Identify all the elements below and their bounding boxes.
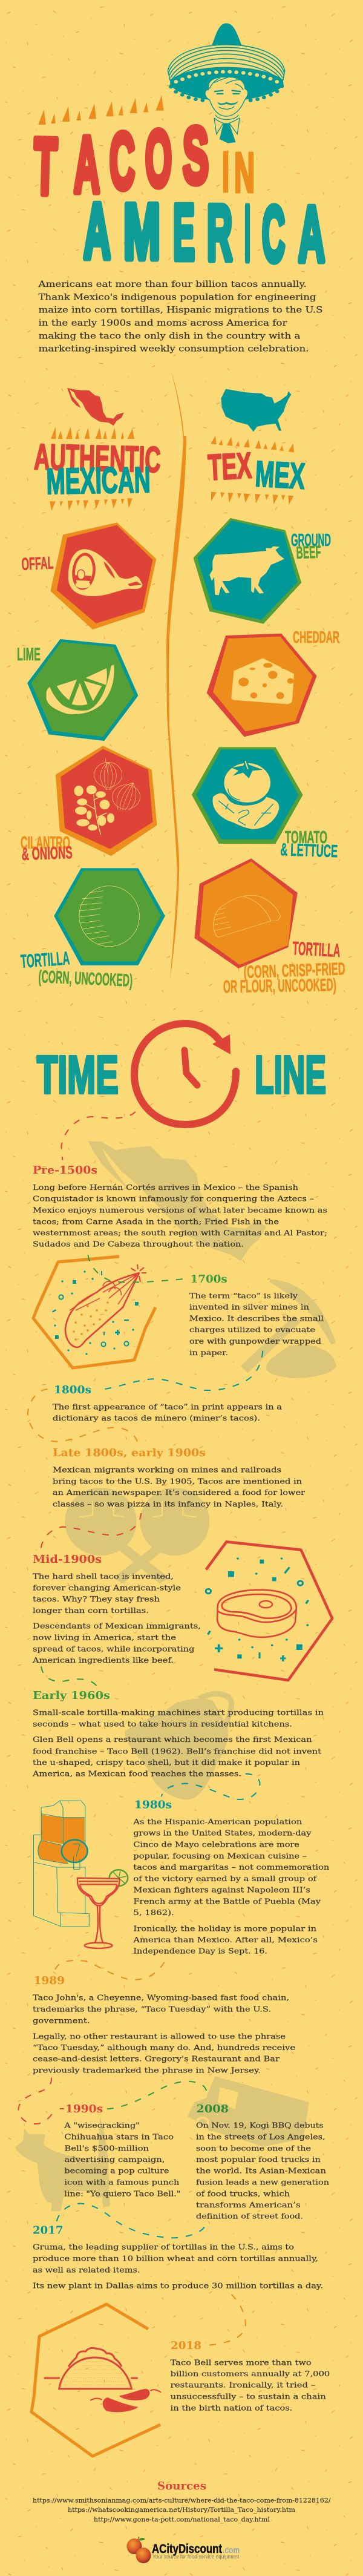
- connector: early 1960s to 1980s: [162, 1774, 260, 1799]
- title: Tacos: O: [145, 114, 172, 203]
- heading: Early 1960s: Early 1960s: [33, 1689, 110, 1702]
- watermark: pickaxe and rock: [241, 1279, 336, 1378]
- hexagon: ground beef: [194, 518, 301, 624]
- label: tomato and lettuce: TOMATO: [285, 828, 327, 847]
- text: 1989: “Taco Tuesday,” although many do. And, hundreds receive: [33, 2043, 295, 2052]
- heading: 1700s: 1700s: [191, 1273, 227, 1286]
- bunting: below Tex Mex: [211, 492, 293, 505]
- text: Early 1960s: [32, 1707, 324, 1778]
- connector: 1990s to 2008: [107, 2082, 208, 2109]
- label: cilantro and onions: & ONIONS: [21, 843, 73, 864]
- text: Mid-1900s: [32, 1571, 201, 1664]
- icon: onions and cilantro: [74, 758, 140, 834]
- text: 1989: previously trademarked the phrase in New Jersey.: [33, 2065, 261, 2074]
- intro text: [38, 280, 323, 354]
- heading: 1989: 1989: [34, 1974, 65, 1987]
- illustration: margarita machine and glass: [33, 1801, 128, 1948]
- title: Tacos: T: [33, 122, 58, 211]
- intro text: making the taco the only dish in the country with a: [39, 331, 300, 341]
- text: Pre-1500s: Mexico enjoys numerous versions of what later became known as: [33, 1205, 327, 1214]
- connector: mid-1900s to early 1960s: [41, 1666, 97, 1687]
- heading: Mexican: MEXICAN: [46, 459, 151, 502]
- text: 1989: Taco John's, a Cheyenne, Wyoming-based fast food chain,: [33, 1993, 289, 2002]
- text: 1980s: Cinco de Mayo celebrations are more: [133, 1840, 299, 1849]
- text: 1980s: tacos and margaritas – not commemoration: [133, 1862, 329, 1871]
- text: Early 1960s: the u-shaped, crispy taco shell, but it did make it popular in: [33, 1758, 300, 1767]
- title: America: R: [207, 189, 232, 277]
- text: A: [298, 191, 325, 278]
- text: 1990s: Bell's $500-million: [64, 2143, 149, 2152]
- title: In: N: [234, 141, 255, 204]
- text: 1990s: becoming a pop culture: [64, 2166, 169, 2175]
- logo: ACityDiscount: ACityDiscount: [152, 2542, 222, 2556]
- text: 2017: Gruma, the leading supplier of tortillas in the U.S., aims to: [33, 2242, 294, 2252]
- text: 1700s: in paper.: [189, 1348, 228, 1357]
- bunting: below Mexican: [50, 498, 132, 511]
- intro text: Americans eat more than four billion tacos annually.: [38, 280, 307, 289]
- watermark: crossed maracas: [65, 1488, 209, 1584]
- text: 1990s: advertising campaign,: [64, 2155, 165, 2164]
- text: 1700s: invented in silver mines in: [189, 1303, 309, 1312]
- hexagon: cilantro and onions: [56, 746, 157, 856]
- connector: 1700s to 1800s: [99, 1351, 263, 1390]
- text: 1990s: icon with a famous punch: [64, 2177, 179, 2186]
- label: offal: OFFAL: [21, 553, 54, 574]
- icon: lime wedge: [47, 665, 114, 714]
- text: 1989: Legally, no other restaurant is allowed to use the phrase: [33, 2031, 286, 2040]
- title: America: I: [244, 190, 250, 277]
- text: 2008: most popular food trucks in: [196, 2155, 321, 2164]
- connector: 2017 to 2018: [206, 2295, 246, 2345]
- text: 1980s: Ironically, the holiday is more popular in: [133, 1924, 316, 1933]
- intro text: marketing-inspired weekly consumption celebration.: [39, 344, 309, 354]
- intro text: maize into corn tortillas, Hispanic migrations to the U.S: [39, 306, 323, 315]
- text: 2008: transforms American’s: [196, 2200, 301, 2209]
- bunting: above Authentic: [51, 427, 134, 439]
- hexagon: tomato and lettuce: [192, 747, 303, 844]
- text: 1989: government.: [33, 2016, 90, 2025]
- hexagon: lime: [27, 639, 138, 741]
- text: Pre-1500s: Long before Hernán Cortés arrives in Mexico – the Spanish: [33, 1183, 298, 1192]
- text: 1980s: Independence Day is Sept. 16.: [133, 1947, 267, 1956]
- logo: ACityDiscount: Your source for food service equipment: [152, 2554, 239, 2560]
- text: 1990s: Chihuahua stars in Taco: [64, 2132, 174, 2141]
- icon: ham: [68, 549, 142, 596]
- label: cilantro and onions: [21, 833, 73, 864]
- text: Pre-1500s: Conquistador is known infamously for conquering the Aztecs –: [33, 1194, 314, 1203]
- hexagon: tex-mex tortilla: [194, 858, 298, 968]
- text: Pre-1500s: Sudados and De Cabeza throughout the nation.: [33, 1240, 244, 1249]
- intro text: Thank Mexico's indigenous population for engineering: [39, 292, 316, 302]
- icon: taco shell: [214, 895, 280, 937]
- text: late 1800s: [53, 1465, 305, 1508]
- text: 1800s: [53, 1402, 283, 1422]
- text: 2018: restaurants. Ironically, it tried –: [171, 2380, 315, 2390]
- text: Mid-1900s: now living in America, start the: [33, 1633, 176, 1642]
- text: 1700s: The term “taco” is likely: [189, 1291, 298, 1300]
- text: 1980s: French army at the Battle of Puebla (May: [133, 1896, 321, 1905]
- icon: tomato and lettuce: [212, 759, 279, 829]
- hexagon: cheddar: [207, 634, 317, 737]
- text: 2017: [33, 2242, 323, 2290]
- text: Mid-1900s: forever changing American-style: [33, 1583, 181, 1592]
- text: 2008: definition of street food.: [196, 2212, 303, 2221]
- connector: 1800s to late 1800s: [28, 1389, 139, 1445]
- icon: cheese: [231, 658, 294, 704]
- label: cilantro and onions: CILANTRO: [21, 833, 70, 853]
- icon: clock with arrow: [134, 1024, 236, 1125]
- text: 2018: unsuccessfully – to sustain a chain: [171, 2391, 326, 2400]
- title: America: C: [262, 191, 285, 278]
- logo: ACityDiscount: .com: [223, 2545, 240, 2555]
- heading: 1800s: 1800s: [54, 1384, 91, 1396]
- title: In: I: [222, 140, 229, 203]
- label: ground beef: BEEF: [296, 543, 321, 563]
- text: 1700s: Mexico. It describes the small: [189, 1313, 324, 1322]
- text: S: [183, 111, 209, 200]
- text: 1980s: of the victory earned by a small group of: [133, 1874, 318, 1883]
- text: 1980s: As the Hispanic-American population: [132, 1817, 302, 1826]
- illustration: taco in orange frame: [33, 1257, 155, 1368]
- title: Tacos: [33, 111, 209, 211]
- text: 2018: [171, 2358, 330, 2412]
- text: 1700s: charges utilized to evacuate: [189, 1325, 315, 1334]
- text: Mid-1900s: longer than corn tortillas.: [33, 1606, 149, 1615]
- heading: Sources: Sources: [157, 2480, 206, 2492]
- text: 1989: [33, 1993, 295, 2074]
- text: 1980s: America than Mexico. After all, Mexico’s: [132, 1935, 318, 1944]
- logo: ACityDiscount: [127, 2537, 240, 2563]
- watermark: chihuahua: [15, 2117, 110, 2211]
- hexagon: offal: [50, 522, 156, 629]
- heading: Mid-1900s: Mid-1900s: [33, 1553, 102, 1566]
- text: Pre-1500s: [33, 1183, 327, 1249]
- heading: 1990s: 1990s: [65, 2103, 103, 2115]
- connector: clock to pre-1500s: [61, 1112, 136, 1160]
- text: sources list: https://www.smithsonianmag.com/arts-culture/where-did-the-taco-come-from-81228162/: [33, 2497, 331, 2504]
- text: late 1800s: classes – so was pizza in its infancy in Naples, Italy.: [53, 1499, 283, 1508]
- text: Mid-1900s: Descendants of Mexican immigrants,: [33, 1622, 201, 1631]
- text: Pre-1500s: westernmost areas; the south region with Carnitas and Al Pastor;: [33, 1228, 327, 1237]
- icon: map of Mexico: [67, 388, 124, 426]
- text: 2008: soon to become one of the: [196, 2143, 311, 2152]
- heading: 1980s: 1980s: [134, 1799, 172, 1812]
- title: America: E: [173, 189, 195, 276]
- text: 2008: [196, 2121, 329, 2221]
- label: lime: LIME: [17, 645, 41, 665]
- text: Early 1960s: America, as Mexican food reaches the masses.: [32, 1769, 241, 1778]
- title: America: M: [123, 188, 160, 275]
- text: 1980s: [132, 1817, 329, 1956]
- text: Early 1960s: Glen Bell opens a restaurant which becomes the first Mexican: [33, 1735, 312, 1744]
- heading: Authentic: AUTHENTIC: [34, 436, 161, 480]
- text: 1990s: line: "Yo quiero Taco Bell.": [64, 2189, 180, 2198]
- text: late 1800s: Mexican migrants working on mines and railroads: [53, 1465, 281, 1474]
- text: 1800s: dictionary as tacos de minero (miner’s tacos).: [53, 1413, 260, 1422]
- illustration: taco and chilies in orange frame: [31, 2304, 161, 2456]
- text: 1700s: ore with gunpowder wrapped: [189, 1336, 321, 1346]
- text: 1980s: popular, focusing on Mexican cuisine –: [133, 1851, 307, 1860]
- text: Early 1960s: seconds – what used to take hours in residential kitchens.: [33, 1719, 292, 1728]
- connector: 2008 to 2017: [57, 2204, 206, 2238]
- text: sources list: http://www.gone-ta-pott.com/national_taco_day.html: [94, 2517, 270, 2523]
- text: 2018: billion customers annually at 7,000: [171, 2369, 330, 2378]
- label: tortilla corn crisp-fried or flour: [223, 938, 345, 997]
- text: 2018: in the birth nation of tacos.: [171, 2403, 292, 2412]
- heading: Time: TIME: [37, 1045, 119, 1105]
- title: Tacos: A: [74, 120, 100, 209]
- text: 1980s: Mexican fighters against Napoleon III’s: [133, 1885, 310, 1894]
- text: Pre-1500s: tacos; from Carne Asada in the north; Fried Fish in the: [33, 1217, 279, 1226]
- text: sources list: https://whatscookingamerica.net/History/Tortilla_Taco_history.htm: [68, 2507, 296, 2514]
- connector: 1980s to 1989: [55, 1960, 166, 1980]
- icon: cow: [209, 547, 284, 595]
- text: 2008: in the streets of Los Angeles,: [196, 2132, 325, 2141]
- text: 2017: produce more than 10 billion wheat and corn tortillas annually,: [33, 2254, 318, 2263]
- text: 2017: as well as related items.: [33, 2265, 140, 2274]
- text: late 1800s: bring tacos to the U.S. By 1905, Tacos are mentioned in: [53, 1476, 302, 1485]
- title: Tacos: C: [110, 116, 135, 205]
- text: 2008: of food trucks, which: [196, 2189, 290, 2198]
- icon: tortilla: [79, 886, 139, 947]
- watermark: Mexico map: [88, 1141, 266, 1261]
- label: tomato and lettuce: [280, 828, 338, 861]
- heading: Late 1800s, early 1900s: Late 1800s, early 1900s: [53, 1447, 206, 1459]
- heading: Pre-1500s: Pre-1500s: [33, 1164, 97, 1177]
- divider: hand-drawn vertical line: [166, 371, 186, 979]
- illustration: steak in red frame: [206, 1542, 332, 1680]
- text: Early 1960s: Small-scale tortilla-making machines start producing tortillas in: [33, 1707, 324, 1717]
- text: Mid-1900s: spread of tacos, while incorporating: [33, 1644, 195, 1653]
- text: 2008: fusion leads a new generation: [196, 2177, 329, 2186]
- text: 1800s: The first appearance of “taco” in print appears in a: [53, 1402, 283, 1411]
- heading: 2018: 2018: [171, 2339, 201, 2352]
- label: tortilla corn uncooked: [20, 947, 133, 991]
- hexagon: corn tortilla: [54, 868, 165, 965]
- connector: late 1800s to mid-1900s: [41, 1513, 141, 1551]
- text: 1989: trademarks the phrase, “Taco Tuesday” with the U.S.: [33, 2004, 271, 2013]
- bunting: above Tex: [211, 436, 294, 452]
- watermark: pottery jug: [125, 1694, 232, 1799]
- text: sources list: [33, 2497, 331, 2523]
- heading: Tex: TEX: [207, 445, 253, 488]
- title: In: [222, 140, 255, 204]
- intro text: in the early 1900s and moms across America for: [39, 318, 287, 328]
- text: 2008: On Nov. 19, Kogi BBQ debuts: [196, 2121, 324, 2130]
- text: 2018: Taco Bell serves more than two: [171, 2358, 312, 2367]
- text: 2017: Its new plant in Dallas aims to produce 30 million tortillas a day.: [33, 2281, 323, 2290]
- text: 1989: cease-and-desist letters. Gregory's Restaurant and Bar: [33, 2054, 280, 2063]
- title: America: [83, 188, 325, 278]
- heading: Mex: MEX: [254, 453, 306, 496]
- text: 1980s: grows in the United States, modern-day: [133, 1828, 312, 1838]
- text: 1990s: [64, 2121, 180, 2198]
- title: America: A: [83, 188, 111, 275]
- text: Mid-1900s: American ingredients like beef.: [32, 1655, 174, 1664]
- text: Mid-1900s: The hard shell taco is invented,: [33, 1571, 174, 1580]
- icon: map of USA: [221, 389, 291, 432]
- text: 1990s: A "wisecracking": [64, 2121, 140, 2130]
- text: Mid-1900s: tacos. Why? They stay fresh: [33, 1594, 160, 1603]
- watermark: food truck: [188, 2077, 309, 2147]
- bunting: above title: [38, 95, 164, 125]
- label: tortilla corn uncooked: (CORN, UNCOOKED): [38, 967, 133, 991]
- text: 1700s: [189, 1291, 324, 1357]
- text: 1980s: 5, 1862).: [133, 1908, 174, 1917]
- icon: mariachi mascot in sombrero: [168, 23, 285, 143]
- label: tortilla corn uncooked: TORTILLA: [20, 947, 70, 972]
- heading: 2008: 2008: [196, 2103, 229, 2115]
- heading: 2017: 2017: [33, 2224, 63, 2237]
- text: 2008: the world. Its Asian-Mexican: [196, 2166, 326, 2175]
- connector: Pre-1500s to 1700s: [88, 1255, 186, 1283]
- label: ground beef: [291, 531, 331, 563]
- text: late 1800s: an American newspaper. It’s considered a food for lower: [53, 1488, 305, 1497]
- connector: 1989 to 1990s: [18, 2078, 64, 2124]
- text: Early 1960s: food franchise – Taco Bell (1962). Bell’s franchise did not invent: [33, 1746, 321, 1755]
